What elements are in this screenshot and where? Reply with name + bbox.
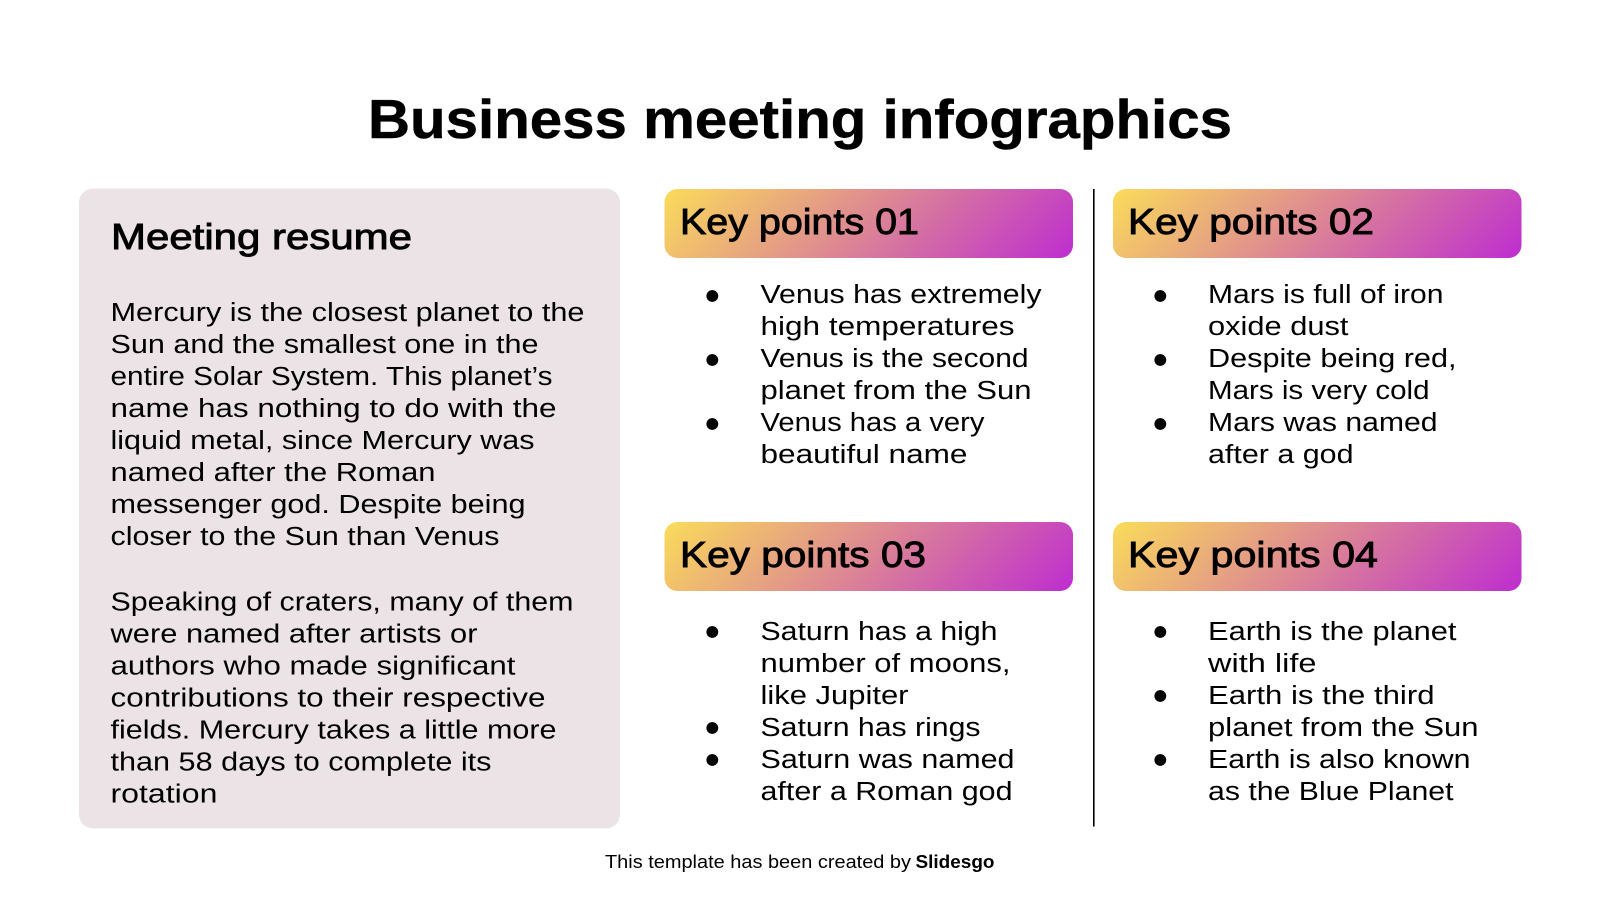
first paragraph: named after the Roman xyxy=(110,459,436,487)
panel: meeting resume xyxy=(79,188,620,828)
bullet list 02: Mars is full of iron xyxy=(1208,281,1444,309)
bullet list 02 xyxy=(1154,281,1456,469)
bullet list 01: Venus has extremely xyxy=(760,281,1042,309)
second paragraph: rotation xyxy=(110,780,218,808)
first paragraph: Sun and the smallest one in the xyxy=(110,331,538,359)
bullet list 01: planet from the Sun xyxy=(760,377,1032,405)
first paragraph: closer to the Sun than Venus xyxy=(110,523,500,551)
footer credit: This template has been created by xyxy=(605,851,912,872)
bullet list 03: after a Roman god xyxy=(760,778,1012,806)
bullet list 04: Earth is the planet xyxy=(1208,618,1456,646)
second paragraph: contributions to their respective xyxy=(110,684,546,712)
header bar 03 xyxy=(664,522,1073,591)
bullet list 01: Venus is the second xyxy=(760,345,1028,373)
bullet list 03: Saturn has rings xyxy=(760,714,980,742)
panel heading: Meeting resume xyxy=(111,216,412,257)
second paragraph: fields. Mercury takes a little more xyxy=(110,716,556,744)
footer credit: Slidesgo xyxy=(916,851,994,872)
bullet list 04: as the Blue Planet xyxy=(1208,778,1454,806)
second paragraph: Speaking of craters, many of them xyxy=(110,588,574,616)
first paragraph: name has nothing to do with the xyxy=(110,395,556,423)
bullet list 01 xyxy=(706,281,1042,469)
title: Business meeting infographics xyxy=(368,88,1232,150)
second paragraph: authors who made significant xyxy=(110,652,516,680)
bullet list 02: Despite being red, xyxy=(1208,345,1456,373)
panel: key points 02 xyxy=(1113,189,1522,469)
bullet list 04: with life xyxy=(1207,650,1316,678)
panel: key points 03 xyxy=(664,522,1073,806)
first paragraph xyxy=(110,299,584,551)
header bar 01 xyxy=(664,189,1073,258)
header bar 01: Key points 01 xyxy=(680,201,919,242)
bullet list 03: number of moons, xyxy=(760,650,1010,678)
first paragraph: messenger god. Despite being xyxy=(110,491,526,519)
second paragraph xyxy=(109,588,573,808)
bullet list 02: after a god xyxy=(1208,441,1354,469)
bullet list 04: Earth is also known xyxy=(1208,746,1470,774)
bullet list 01: beautiful name xyxy=(760,441,968,469)
bullet list 02: Mars is very cold xyxy=(1208,377,1430,405)
second paragraph: were named after artists or xyxy=(109,620,478,648)
header bar 03: Key points 03 xyxy=(680,534,926,575)
first paragraph: liquid metal, since Mercury was xyxy=(110,427,534,455)
first paragraph: entire Solar System. This planet’s xyxy=(110,363,552,391)
bullet list 03 xyxy=(706,618,1014,806)
header bar 02 xyxy=(1113,189,1522,258)
header bar 02: Key points 02 xyxy=(1128,201,1374,242)
bullet list 03: Saturn was named xyxy=(760,746,1014,774)
bullet list 04 xyxy=(1154,618,1478,806)
center divider xyxy=(1093,189,1095,826)
bullet list 02: Mars was named xyxy=(1208,409,1438,437)
bullet list 01: Venus has a very xyxy=(760,409,985,437)
second paragraph: than 58 days to complete its xyxy=(110,748,492,776)
header bar 04 xyxy=(1113,522,1522,591)
first paragraph: Mercury is the closest planet to the xyxy=(110,299,584,327)
bullet list 02: oxide dust xyxy=(1208,313,1348,341)
bullet list 04: Earth is the third xyxy=(1208,682,1434,710)
bullet list 01: high temperatures xyxy=(760,313,1014,341)
bullet list 04: planet from the Sun xyxy=(1208,714,1478,742)
header bar 04: Key points 04 xyxy=(1128,534,1378,575)
bullet list 03: Saturn has a high xyxy=(760,618,998,646)
bullet list 03: like Jupiter xyxy=(760,682,909,710)
panel: key points 04 xyxy=(1113,522,1522,806)
panel: key points 01 xyxy=(664,189,1073,469)
